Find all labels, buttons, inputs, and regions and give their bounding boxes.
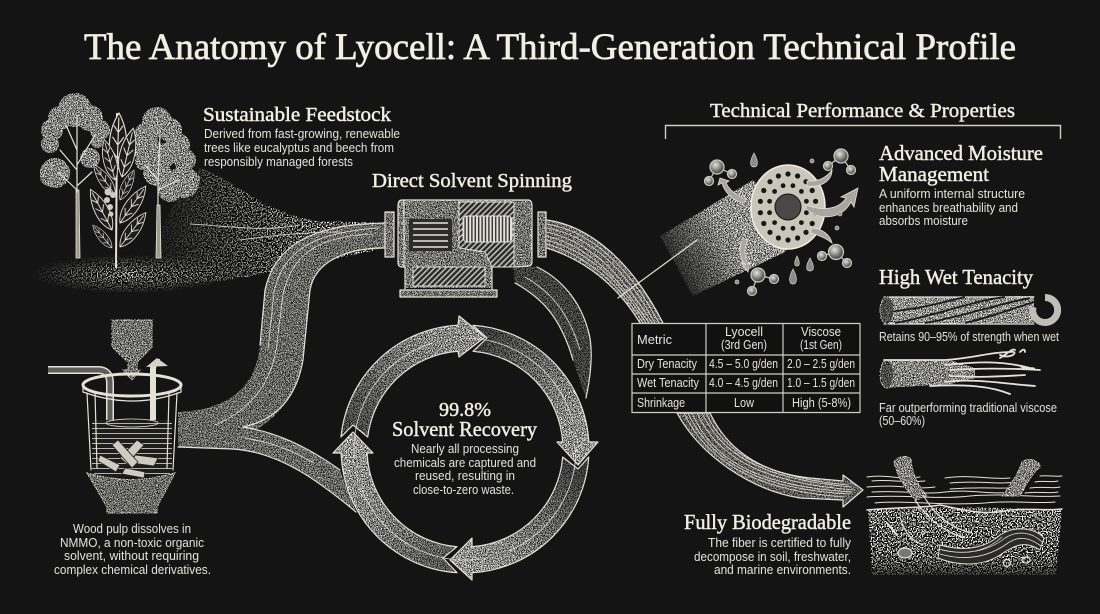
text: moisture description (879, 187, 1025, 228)
fiber pores (758, 171, 818, 243)
icon: feedstock trees and plant (40, 93, 200, 268)
table header row: Lyocell (725, 324, 763, 339)
ground stipple (30, 252, 230, 292)
text: reactor description: complex chemical derivatives. (54, 563, 211, 577)
heading: direct solvent spinning: Direct Solvent Spinning (372, 171, 572, 192)
fiber stick right (1002, 460, 1040, 496)
machine vent (413, 223, 448, 247)
text: moisture description: absorbs moisture (879, 214, 968, 228)
text: biodegradable description: decompose in soil, freshwater, (694, 550, 851, 564)
table row: dry tenacity: Dry Tenacity (637, 356, 697, 371)
text: viscose comparison: Far outperforming traditional viscose (879, 401, 1057, 415)
text: feedstock description: responsibly managed forests (204, 155, 353, 169)
rope ring (1033, 297, 1058, 322)
band: spun fiber to table (547, 220, 663, 323)
table row: shrinkage: High (5-8%) (792, 395, 851, 410)
process flow bands (178, 220, 863, 512)
band: machine to recovery ring (513, 267, 591, 398)
text: recovery description (394, 442, 536, 497)
table row: shrinkage (637, 395, 851, 410)
reactor logs (98, 440, 158, 478)
text: feedstock description: trees like eucalyptus and beech from (204, 141, 394, 155)
fiber leader line (618, 240, 697, 298)
reactor outlet pipe (153, 362, 160, 433)
water molecules (704, 149, 856, 296)
table header row: (3rd Gen) (721, 337, 767, 352)
band: reactor to recovery ring (178, 415, 356, 512)
heading: technical performance: Technical Performance & Properties (710, 100, 1015, 122)
heading: sustainable feedstock: Sustainable Feedstock (203, 105, 391, 126)
reactor hopper (112, 320, 152, 380)
text: recovery description: close-to-zero waste. (413, 483, 514, 497)
recovery ring arrows (333, 316, 598, 580)
rope end cap (880, 297, 894, 324)
text: feedstock description (204, 127, 400, 169)
text: reactor description: solvent, without requiring (64, 549, 199, 563)
bracket (666, 126, 1060, 139)
fiber disc (751, 165, 825, 249)
icon: biodegrading fibers in soil and water (867, 456, 1062, 575)
text: reactor description: NMMO, a non-toxic organic (60, 536, 204, 550)
soil stipple (868, 508, 1062, 575)
table row: shrinkage: Shrinkage (637, 395, 685, 410)
fiber body (660, 180, 800, 296)
water lines (867, 476, 1062, 504)
icon: intact twisted fiber (880, 296, 1058, 324)
reactor inlet pipe (48, 370, 110, 440)
heading: fully biodegradable: Fully Biodegradable (684, 510, 851, 534)
icon: frayed fiber (880, 349, 1040, 394)
table header row: Metric (637, 332, 672, 347)
machine lower hatch (413, 267, 485, 286)
arrow: ring left to top (341, 316, 485, 437)
water droplets (735, 153, 842, 284)
machine roller (463, 216, 512, 242)
machine flanges (385, 200, 546, 297)
frayed strands (884, 349, 1040, 394)
icon: dissolving reactor (48, 320, 181, 513)
band: machine to reactor (178, 223, 385, 447)
center plant (84, 113, 151, 268)
moisture arrows (718, 170, 858, 272)
text: recovery description: chemicals are captured and (394, 456, 536, 470)
text: reactor description: Wood pulp dissolves in (73, 522, 191, 536)
text: biodegradable description (694, 536, 852, 577)
reactor funnel base (87, 473, 175, 513)
heading: advanced moisture management: Management (879, 162, 989, 186)
table header row (637, 324, 842, 352)
fiber stick left (894, 456, 927, 500)
arrow: ring bottom to left (333, 432, 457, 573)
icon: fiber cross-section (618, 149, 858, 298)
text: moisture description: A uniform internal structure (879, 187, 1025, 201)
text: viscose comparison (879, 401, 1057, 428)
buried ribbon (938, 529, 1044, 564)
table row: shrinkage: Low (734, 395, 755, 410)
stat: solvent recovery (392, 399, 537, 441)
text: reactor description (54, 522, 211, 577)
text: wet strength retained: Retains 90–95% of strength when wet (879, 330, 1059, 344)
arrow: table to biodegradable (677, 413, 863, 507)
arrow: ring top to right (473, 325, 598, 465)
funnel stipple (150, 168, 385, 284)
text: moisture description: enhances breathability and (879, 201, 1018, 215)
heading: advanced moisture management (879, 141, 1043, 186)
table row: dry tenacity (637, 356, 855, 371)
frayed end cap (880, 360, 894, 388)
comparison table (632, 323, 860, 412)
machine: spinning unit (385, 200, 546, 297)
frayed body (884, 360, 975, 388)
text: recovery description: reused, resulting in (415, 469, 515, 483)
reactor vessel (87, 393, 177, 470)
text: biodegradable description: The fiber is certified to fully (708, 536, 852, 550)
stipple: feedstock dispersal (30, 168, 385, 292)
machine hatch panel (459, 202, 514, 267)
soil debris (887, 517, 1030, 566)
reactor liquid (92, 420, 172, 477)
machine dark panel behind vent (409, 219, 452, 251)
flow strand lines (178, 220, 863, 512)
machine outline (385, 200, 546, 297)
table row: wet tenacity: 4.0 – 4.5 g/den (709, 375, 778, 390)
table grid (632, 323, 860, 412)
arrow: ring right to bottom (450, 457, 589, 580)
text: feedstock description: Derived from fast-growing, renewable (204, 127, 400, 141)
tree crowns stippled (40, 93, 200, 202)
stat: solvent recovery: Solvent Recovery (392, 417, 537, 441)
table row: wet tenacity (637, 375, 855, 390)
stat: solvent recovery: 99.8% (439, 399, 491, 421)
text: viscose comparison: (50–60%) (879, 414, 925, 428)
table row: dry tenacity: 2.0 – 2.5 g/den (787, 356, 855, 371)
text: biodegradable description: and marine environments. (714, 563, 851, 577)
title: The Anatomy of Lyocell: A Third-Generation Technical Profile (84, 27, 1016, 68)
table header row: Viscose (801, 324, 841, 339)
heading: high wet tenacity: High Wet Tenacity (879, 265, 1033, 289)
table row: dry tenacity: 4.5 – 5.0 g/den (709, 356, 778, 371)
tree trunks (76, 190, 161, 258)
text: recovery description: Nearly all processing (411, 442, 519, 456)
heading: advanced moisture management: Advanced Moisture (879, 141, 1043, 165)
table row: wet tenacity: Wet Tenacity (637, 375, 699, 390)
table header row: (1st Gen) (800, 337, 842, 352)
rope body (884, 296, 1034, 324)
table row: wet tenacity: 1.0 – 1.5 g/den (787, 375, 855, 390)
